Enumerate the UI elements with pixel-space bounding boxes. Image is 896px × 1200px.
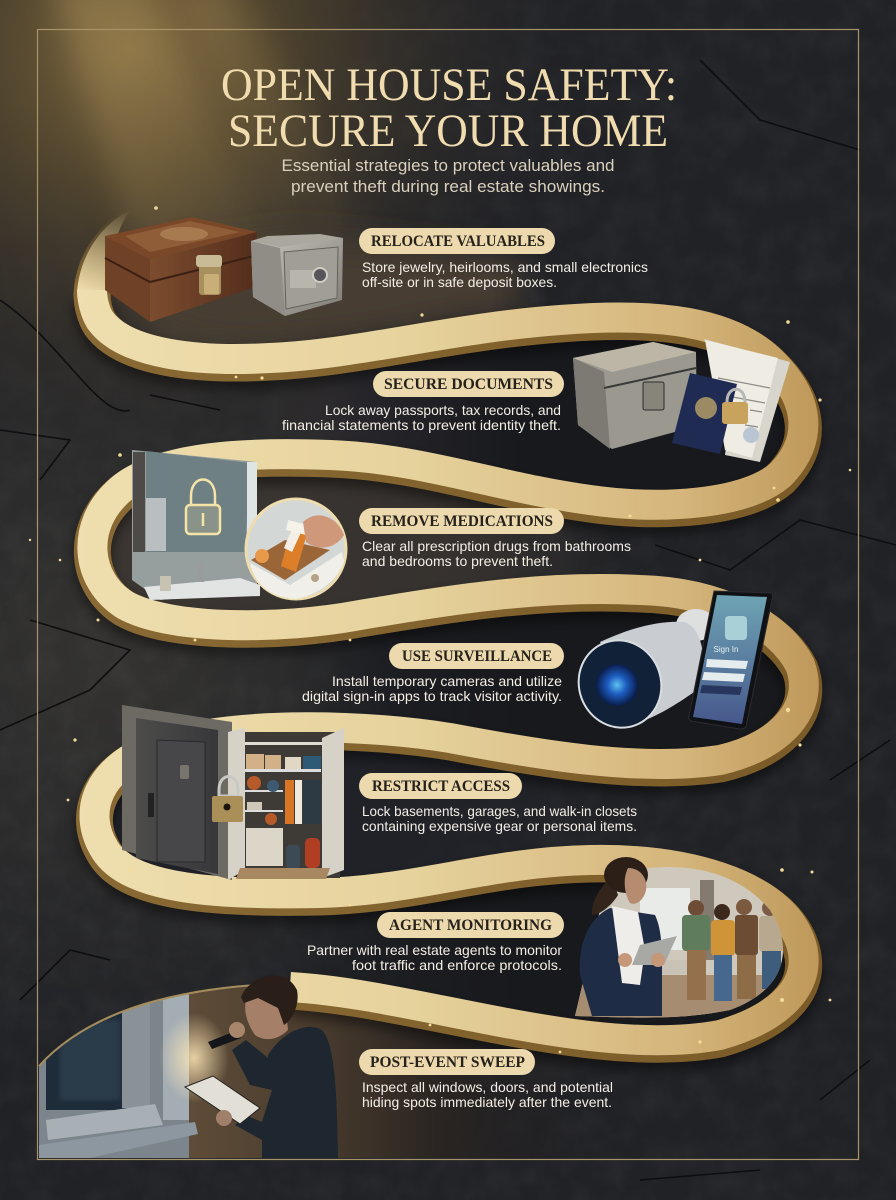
text: post-event sweep description [362, 1079, 613, 1110]
text: relocate valuables description: off-site or in safe deposit boxes. [362, 274, 557, 290]
icon: steel safe [251, 234, 343, 316]
ribbon loop interiors [92, 235, 804, 1040]
subtitle: Essential strategies to protect valuables and [282, 157, 614, 175]
icon: documents [704, 339, 790, 462]
icon: phone with sign-in app [689, 591, 773, 729]
golden winding ribbon path [74, 206, 804, 1051]
text: secure documents description [282, 402, 561, 433]
figure: real estate agent with tablet [580, 857, 677, 1016]
label: remove medications: REMOVE MEDICATIONS [371, 513, 553, 530]
text: use surveillance description: digital sign-in apps to track visitor activity. [302, 688, 562, 704]
label: agent monitoring: AGENT MONITORING [389, 917, 553, 934]
text: remove medications description: Clear all prescription drugs from bathrooms [362, 538, 631, 554]
text: remove medications description [362, 538, 631, 569]
label: use surveillance: USE SURVEILLANCE [402, 648, 552, 665]
subtitle: prevent theft during real estate showings. [291, 178, 605, 196]
icon: brass padlock [212, 776, 243, 822]
title: OPEN HOUSE SAFETY: [221, 59, 677, 111]
icon: organized closet [228, 728, 344, 880]
step 2: secure documents [282, 339, 790, 462]
step 4: use surveillance [302, 591, 773, 739]
icon: steel security door [122, 705, 232, 880]
text: agent monitoring description: foot traffic and enforce protocols. [352, 957, 562, 973]
text: post-event sweep description: hiding spots immediately after the event. [362, 1094, 612, 1110]
text: agent monitoring description: Partner with real estate agents to monitor [307, 942, 562, 958]
text: restrict access description [362, 803, 637, 834]
icon: metal lockbox [573, 342, 697, 449]
icon: wooden jewelry box [105, 217, 257, 322]
figure: man with flashlight and clipboard [185, 975, 338, 1158]
text: remove medications description: and bedrooms to prevent theft. [362, 553, 553, 569]
icon: glowing padlock [186, 480, 220, 534]
label: secure documents: SECURE DOCUMENTS [384, 376, 553, 393]
figures: visitors [682, 899, 783, 1001]
icon: phone with sign-in app: Sign In [714, 645, 738, 654]
text: secure documents description: Lock away passports, tax records, and [325, 402, 561, 418]
label: agent monitoring [377, 912, 564, 938]
step 1: relocate valuables [105, 217, 648, 322]
text: relocate valuables description [362, 259, 648, 290]
label: use surveillance [389, 643, 564, 669]
text: use surveillance description: Install temporary cameras and utilize [332, 673, 562, 689]
text: agent monitoring description [307, 942, 562, 973]
step 7: post-event sweep [185, 975, 613, 1158]
subtitle [282, 157, 614, 196]
text: use surveillance description [302, 673, 562, 704]
photo: living room with visitors [575, 867, 783, 1018]
gold sparkle particles [29, 206, 851, 1053]
step 3: remove medications [132, 450, 631, 600]
label: relocate valuables [359, 228, 555, 254]
icon: medication drawer circle [246, 499, 346, 599]
label: relocate valuables: RELOCATE VALUABLES [371, 233, 545, 250]
step 5: restrict access [122, 705, 637, 880]
icon: bathroom mirror and sink [132, 450, 260, 600]
photo: dim room with window behind the final step [39, 986, 468, 1158]
gold arc line of bottom scene [39, 983, 300, 1066]
icon: passport with padlock [672, 373, 748, 454]
text: post-event sweep description: Inspect all windows, doors, and potential [362, 1079, 613, 1095]
label: remove medications [359, 508, 564, 534]
icon: security camera [566, 609, 716, 739]
label: post-event sweep: POST-EVENT SWEEP [370, 1054, 525, 1071]
label: post-event sweep [359, 1049, 535, 1075]
label: secure documents [373, 371, 564, 397]
label: restrict access [359, 773, 522, 799]
text: relocate valuables description: Store jewelry, heirlooms, and small electronics [362, 259, 648, 275]
title: SECURE YOUR HOME [228, 105, 668, 157]
text: secure documents description: financial statements to prevent identity theft. [282, 417, 561, 433]
text: restrict access description: containing expensive gear or personal items. [362, 818, 637, 834]
text: restrict access description: Lock basements, garages, and walk-in closets [362, 803, 637, 819]
step 6: agent monitoring [308, 857, 783, 1018]
title [221, 59, 677, 157]
label: restrict access: RESTRICT ACCESS [372, 778, 510, 795]
